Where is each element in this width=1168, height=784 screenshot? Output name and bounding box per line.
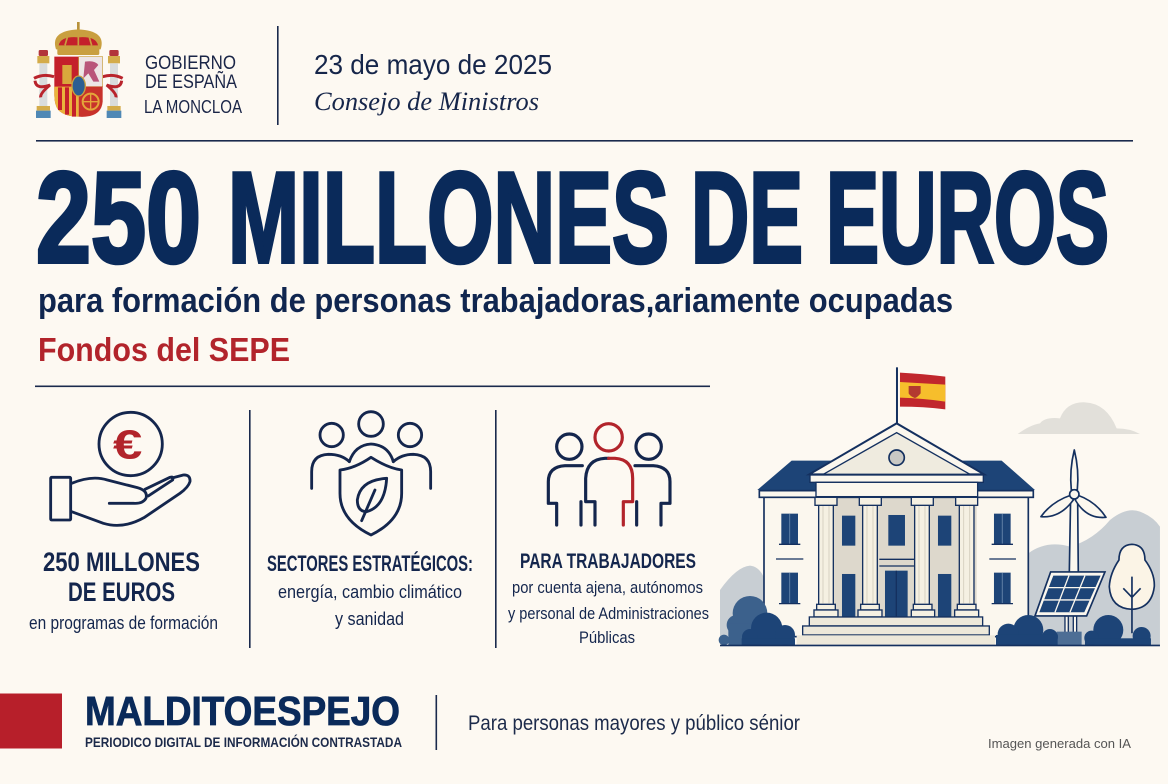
panel text	[278, 582, 462, 629]
main title: DE	[691, 146, 803, 290]
council of ministers: Consejo de Ministros	[314, 87, 539, 116]
header	[34, 22, 552, 125]
date: 23 de mayo de 2025	[314, 49, 552, 80]
background hills and cloud	[720, 402, 1160, 645]
icon: coat of arms of Spain	[34, 22, 123, 118]
divider	[249, 410, 251, 648]
divider	[495, 410, 497, 648]
header divider	[277, 26, 279, 125]
brand tagline: PERIODICO DIGITAL DE INFORMACIÓN CONTRASTADA	[85, 733, 402, 750]
panel heading: SECTORES ESTRATÉGICOS:	[267, 551, 473, 576]
institution name: GOBIERNO	[145, 53, 236, 74]
icon: hand holding euro coin: €	[113, 422, 142, 468]
tree	[1109, 544, 1154, 633]
panel heading: 250 MILLONES	[43, 547, 200, 577]
ground line	[720, 645, 1160, 646]
wind turbine	[1041, 450, 1106, 573]
panel text: en programas de formación	[29, 613, 218, 633]
panel: sectores estratégicos	[267, 412, 473, 629]
panel text: y sanidad	[335, 609, 404, 629]
icon: three workers	[548, 424, 670, 525]
panel heading: DE EUROS	[68, 577, 175, 607]
panel heading	[43, 547, 200, 607]
section rule	[35, 386, 710, 387]
main title: 250	[36, 146, 201, 290]
building	[757, 423, 1035, 645]
flag of Spain	[897, 367, 945, 423]
subtitle: para formación de personas trabajadoras,ariamente ocupadas	[38, 282, 953, 320]
main title: MILLONES	[228, 146, 669, 290]
illustration: government building with flag, wind turbine and solar panel	[719, 367, 1160, 646]
institution name: LA MONCLOA	[144, 97, 242, 117]
top rule	[36, 140, 1133, 142]
solar panel	[1035, 572, 1105, 645]
bushes	[719, 596, 1151, 645]
panel text: energía, cambio climático	[278, 582, 462, 602]
panel heading: PARA TRABAJADORES	[520, 550, 696, 573]
panel text	[508, 578, 709, 647]
institution name	[144, 53, 242, 117]
icon: hand holding euro coin	[51, 412, 190, 525]
funding source: Fondos del SEPE	[38, 331, 290, 368]
panel text: Públicas	[579, 628, 635, 647]
panel: para trabajadores	[508, 424, 709, 647]
AI credit: Imagen generada con IA	[988, 736, 1131, 751]
footer	[0, 688, 1131, 751]
panel: 250 millones	[29, 412, 218, 633]
red brand block	[0, 694, 62, 748]
brand name: MALDITOESPEJO	[85, 688, 400, 734]
panel text: y personal de Administraciones	[508, 604, 709, 623]
footer divider	[436, 695, 437, 750]
audience note: Para personas mayores y público sénior	[468, 712, 800, 735]
icon: people with leaf shield	[312, 412, 431, 535]
institution name: DE ESPAÑA	[145, 71, 237, 93]
panel text: por cuenta ajena, autónomos	[512, 578, 703, 597]
